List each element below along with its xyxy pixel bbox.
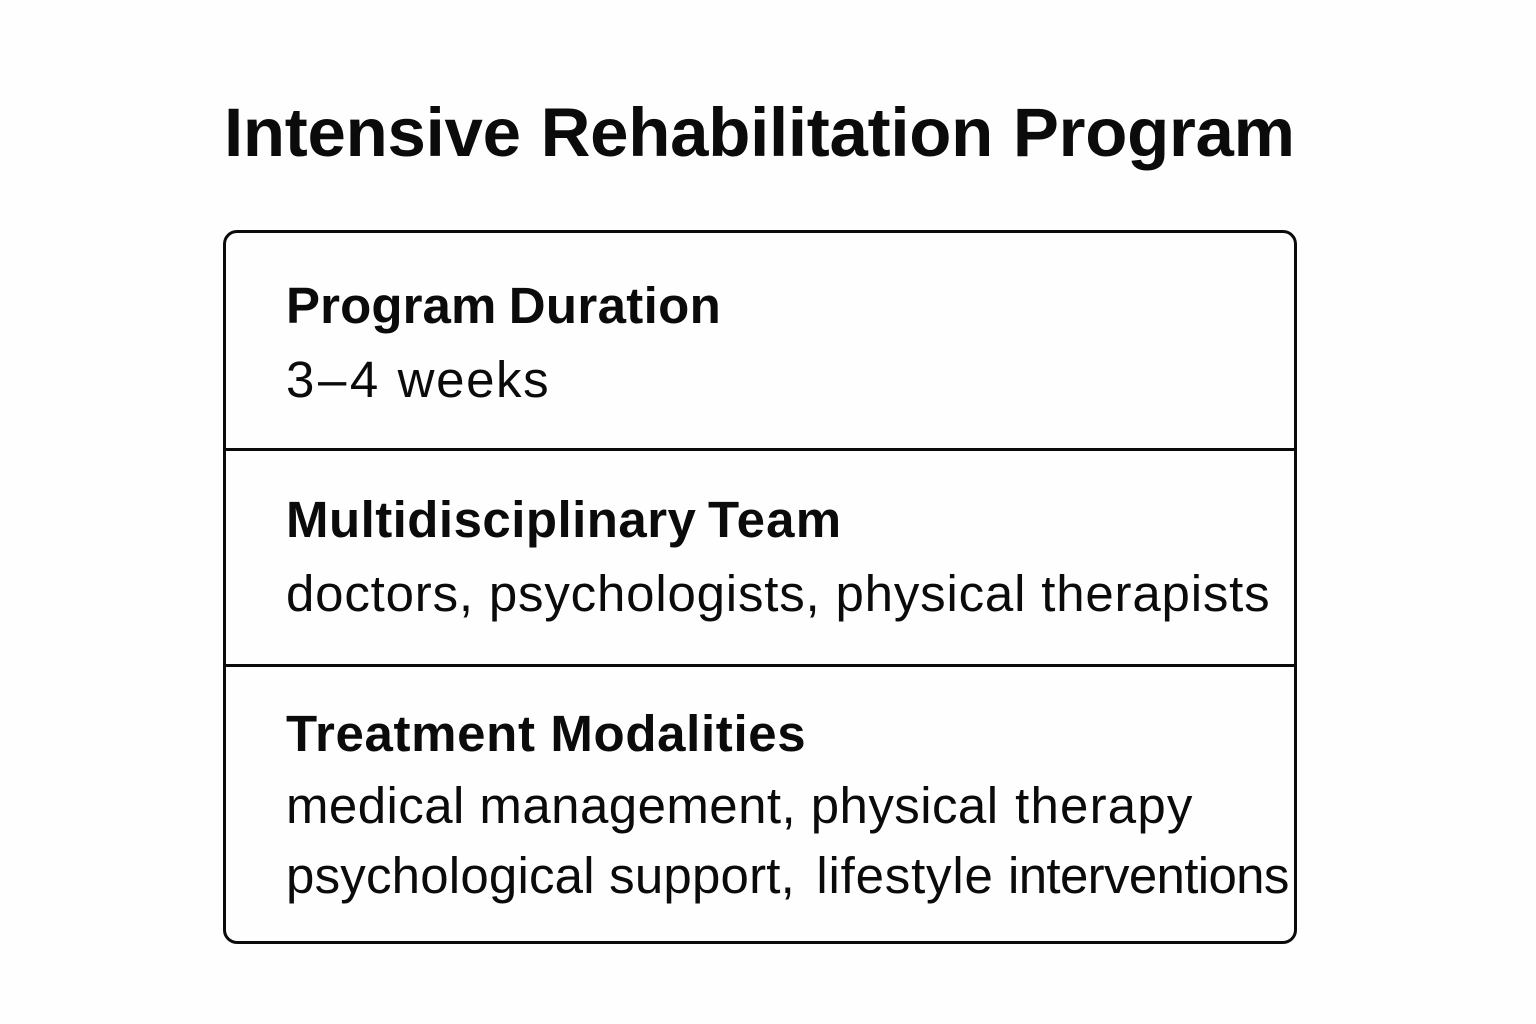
panel: program details table	[223, 230, 1297, 944]
text: modalities line 2: psychological support, lifestyle interventions	[286, 847, 1289, 904]
text: team members: doctors, psychologists, physical therapists	[286, 565, 1270, 622]
section: treatment modalities	[226, 664, 1294, 941]
section: multidisciplinary team	[226, 448, 1294, 664]
heading: program duration: Program Duration	[286, 277, 721, 334]
section: program duration	[286, 277, 721, 408]
text: duration value: 3–4 weeks	[286, 351, 550, 408]
heading: multidisciplinary team: Multidisciplinary Team	[286, 491, 842, 548]
title: Intensive Rehabilitation Program	[224, 94, 1295, 171]
heading: treatment modalities: Treatment Modalities	[286, 705, 806, 762]
text: modalities line 1: medical management, physical therapy	[286, 777, 1194, 834]
